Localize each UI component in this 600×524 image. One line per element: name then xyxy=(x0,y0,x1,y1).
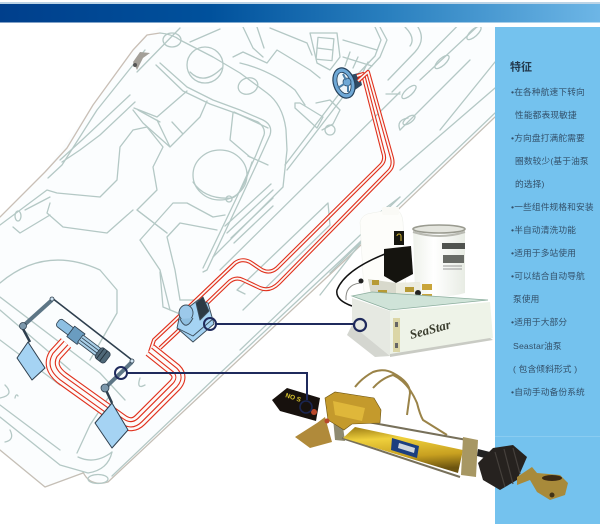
header bar xyxy=(0,2,600,22)
upper and lower tie rods xyxy=(340,417,467,477)
boat line drawing xyxy=(0,0,495,487)
steering wheel xyxy=(329,65,362,101)
connector: cylinder photo to linkage xyxy=(115,367,312,413)
boat interior tint xyxy=(0,27,495,487)
steering cylinder photo: NO S xyxy=(284,392,302,404)
dashboard xyxy=(233,50,320,78)
valve block xyxy=(325,392,381,430)
bracket xyxy=(295,417,332,448)
manifold xyxy=(358,278,432,309)
port tab xyxy=(17,342,45,380)
piston rod xyxy=(477,449,494,460)
feature list xyxy=(511,86,594,397)
feature list: 泵使用 xyxy=(513,293,540,304)
pump cover xyxy=(272,388,320,421)
sponson xyxy=(133,52,150,70)
lower cockpit xyxy=(140,203,225,240)
connector: pump to control block xyxy=(204,318,366,331)
feature list: Seastar油泵 xyxy=(513,340,562,351)
feature list: •半自动清洗功能 xyxy=(511,224,576,235)
feature list: •一些组件规格和安装 xyxy=(511,201,594,212)
control block xyxy=(177,297,214,342)
hose: helm to pump, upper pair xyxy=(150,74,384,352)
reservoir xyxy=(360,209,406,294)
seat well and circle xyxy=(193,150,247,200)
wiring xyxy=(337,254,385,306)
feature list: 圈数较少(基于油泵 xyxy=(515,155,589,166)
rubber bellows xyxy=(478,445,527,490)
feature list: ( 包含倾斜形式 ) xyxy=(513,363,577,374)
feature list: •可以结合自动导航 xyxy=(511,270,585,281)
steering cylinder xyxy=(54,317,111,364)
feature list: •自动手动备份系统 xyxy=(511,386,585,397)
starboard tab xyxy=(95,403,128,448)
feature list: 的选择) xyxy=(515,178,545,189)
right deck diagonals xyxy=(388,27,421,80)
pump brand: SeaStar xyxy=(408,316,453,342)
feature list: •方向盘打满舵需要 xyxy=(511,132,585,143)
steering linkage and trim tabs xyxy=(17,297,134,448)
panel heading: 特征 xyxy=(510,60,532,74)
feature list: •在各种航速下转向 xyxy=(511,86,585,97)
data plate xyxy=(391,438,419,458)
feature list: 性能都表现敏捷 xyxy=(515,109,577,120)
base box xyxy=(347,292,493,357)
hose: helm to pump, lower pair xyxy=(160,72,393,348)
hull outline xyxy=(0,33,160,217)
tie bar xyxy=(52,298,132,360)
main cylinder xyxy=(343,427,463,473)
hose: pump to cylinder loop xyxy=(53,343,178,424)
hoses xyxy=(355,370,447,435)
hydraulic pump photo xyxy=(337,207,493,357)
hydraulic hoses xyxy=(53,72,393,424)
steering cylinder photo xyxy=(272,370,568,500)
rod end xyxy=(517,467,568,500)
roll bar xyxy=(160,33,287,257)
feature list: •适用于多站使用 xyxy=(511,247,576,258)
valve block xyxy=(384,231,413,283)
end plate xyxy=(461,437,478,477)
lower pump cylinder xyxy=(413,225,465,296)
feature list: •适用于大部分 xyxy=(511,316,567,327)
features panel xyxy=(495,27,600,524)
